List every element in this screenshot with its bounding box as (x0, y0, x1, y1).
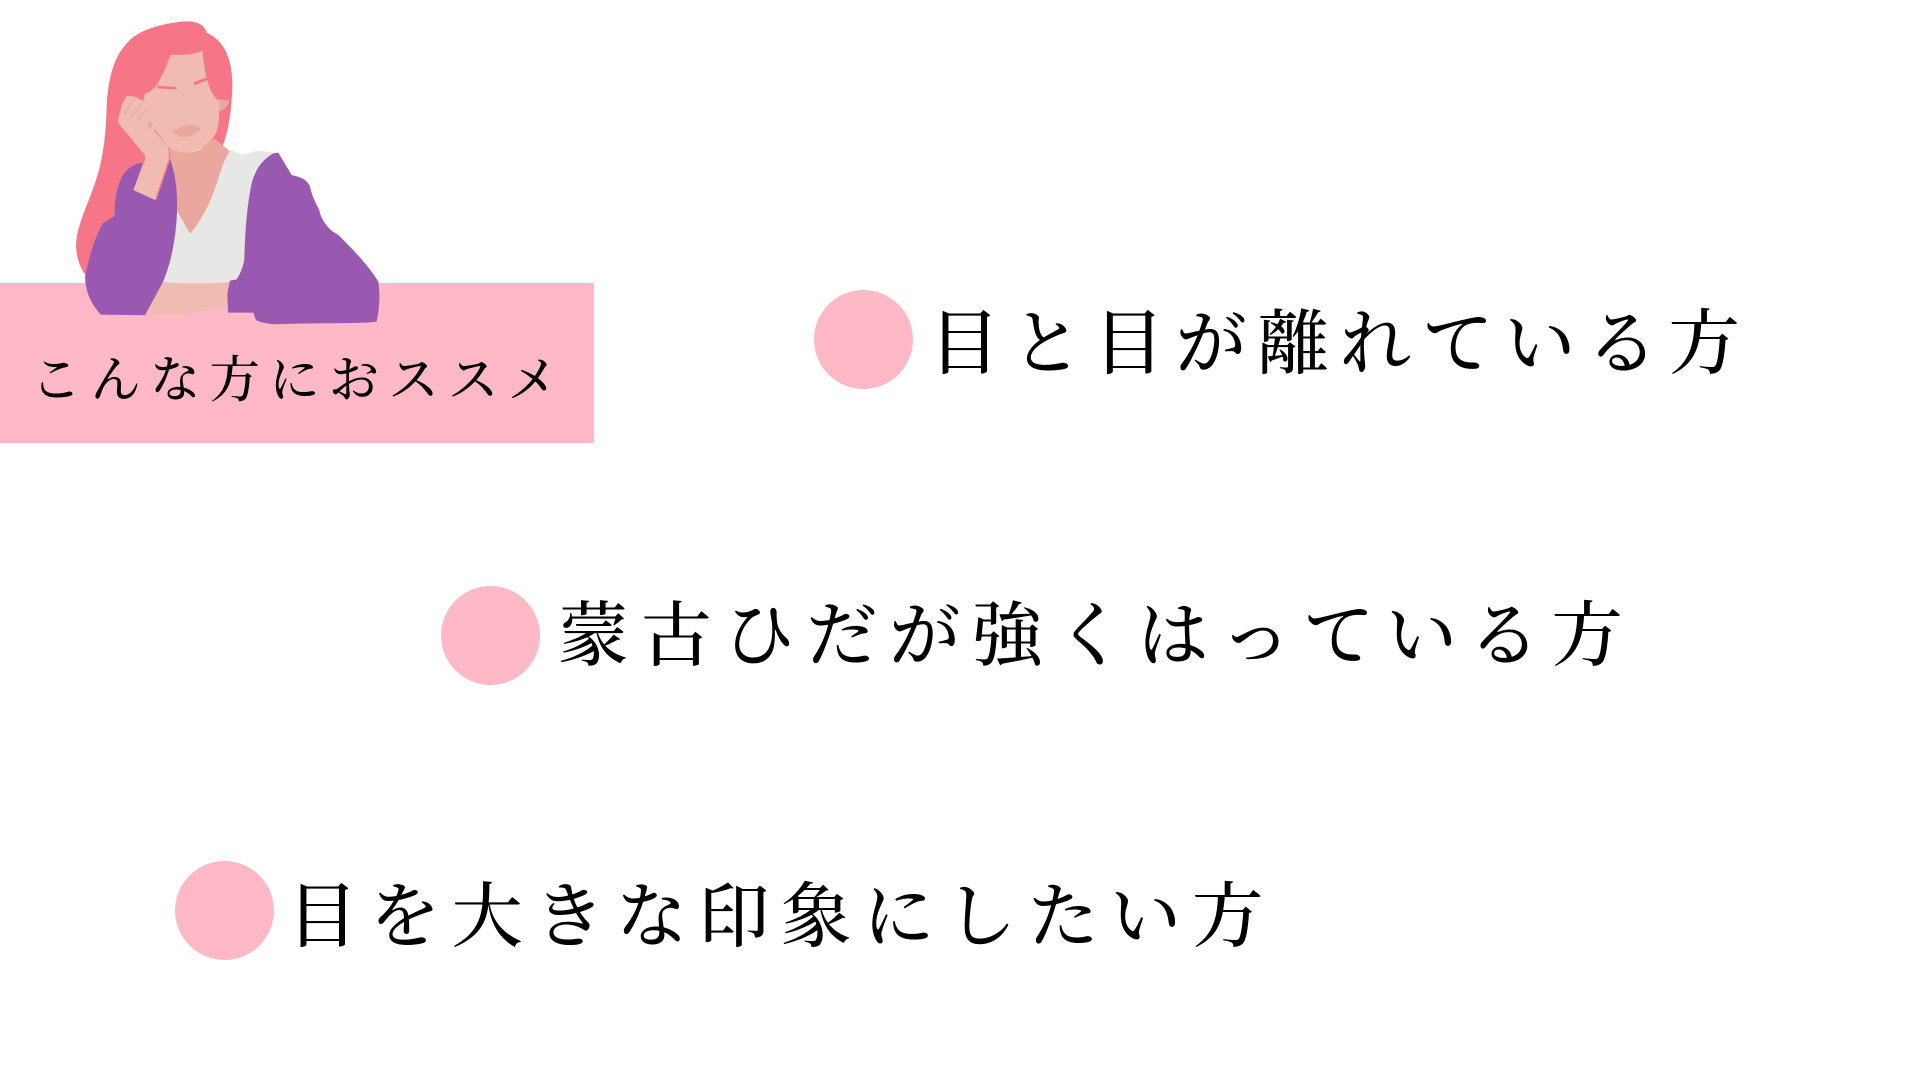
list item 2: 蒙古ひだが強くはっている方 (558, 598, 1634, 676)
bullet dot 1 (814, 290, 913, 389)
label heading: こんな方におススメ (31, 352, 567, 408)
bullet dot 2 (441, 586, 540, 685)
illustration: woman resting cheek on hand (76, 21, 380, 324)
bullet dot 3 (175, 861, 274, 960)
list item 3: 目を大きな印象にしたい方 (287, 879, 1275, 957)
list item 1: 目と目が離れている方 (929, 306, 1751, 384)
panel: pink label band (0, 283, 594, 443)
